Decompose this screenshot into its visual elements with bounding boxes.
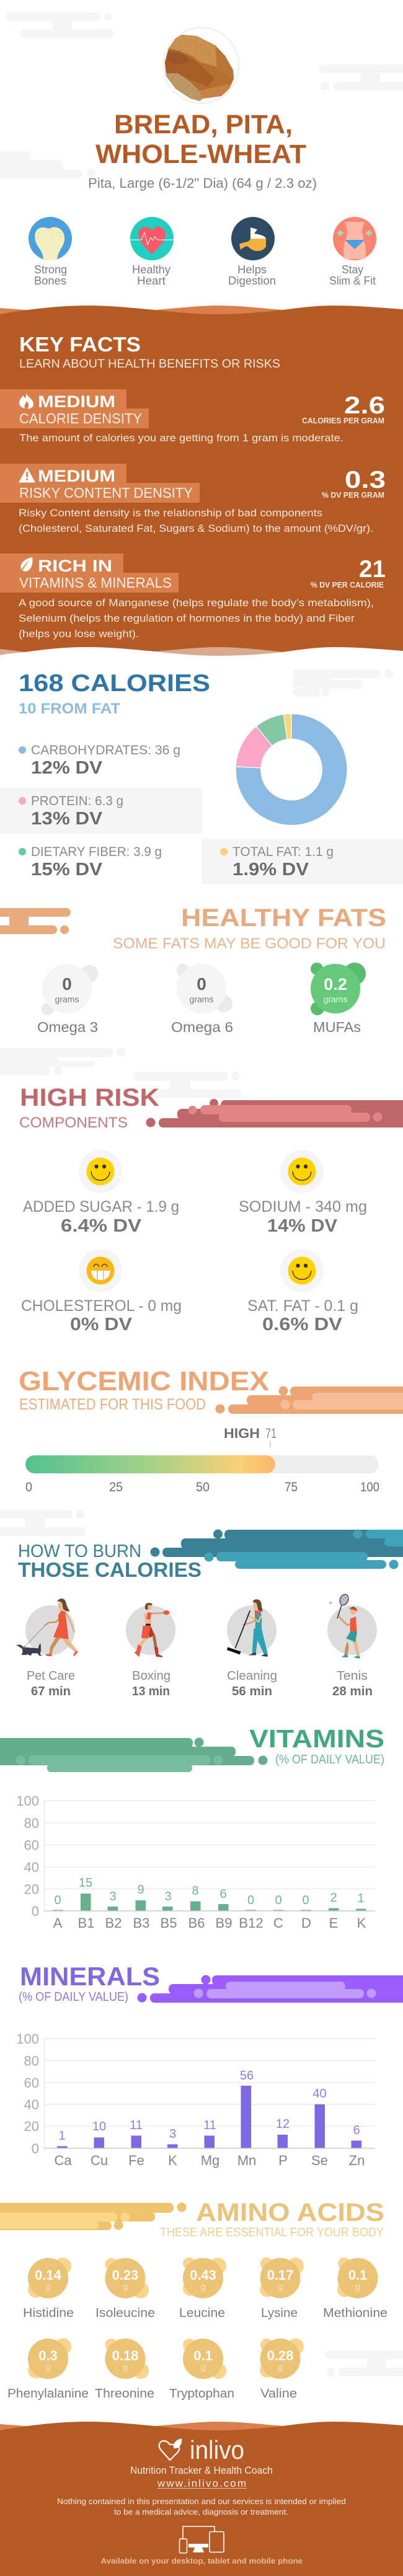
- bar chart: minerals: 6: [353, 2124, 360, 2137]
- macro: carbohydrates: [19, 743, 180, 778]
- macro: total fat: [220, 845, 334, 880]
- macro: dietary fiber: [19, 845, 162, 880]
- amino acid: threonine: g: [123, 2362, 128, 2373]
- activity: tennis: [327, 1593, 377, 1698]
- amino acid: methionine: 0.1: [348, 2267, 367, 2283]
- panel: amino acids: [0, 2198, 388, 2401]
- activity: boxing: 13 min: [132, 1685, 170, 1698]
- macro: protein: PROTEIN: 6.3 g: [31, 794, 123, 808]
- bar chart: vitamins: B5: [161, 1915, 177, 1931]
- disclaimer: to be a medical advice, diagnosis or treatment.: [114, 2507, 288, 2516]
- bar chart: vitamins: B3: [133, 1915, 149, 1931]
- activity: tennis: 28 min: [332, 1685, 373, 1698]
- fact: calorie density: MEDIUM: [38, 392, 115, 411]
- fact: calorie density: 2.6: [344, 392, 385, 419]
- fat: mufas: grams: [324, 994, 347, 1004]
- fat: omega 6: 0: [197, 974, 206, 994]
- benefit: strong bones: [29, 217, 72, 287]
- bar chart: minerals: Fe: [128, 2153, 144, 2168]
- bar chart: minerals: 10: [92, 2120, 106, 2133]
- risk: sodium: [239, 1150, 367, 1236]
- fat: omega 3: [37, 964, 98, 1035]
- panel: healthy fats: [0, 904, 386, 1035]
- website link: www.inlivo.com: [157, 2477, 246, 2489]
- gauge scale: 100: [360, 1480, 379, 1494]
- benefit: healthy heart: Heart: [137, 275, 166, 287]
- fact: calorie density: CALORIES PER GRAM: [302, 416, 384, 425]
- bar chart: minerals: Ca: [54, 2153, 72, 2168]
- fat: mufas: [311, 963, 366, 1035]
- activity: boxing: Boxing: [132, 1669, 170, 1683]
- amino acid: isoleucine: 0.23: [112, 2267, 138, 2283]
- risk: saturated fat: [247, 1249, 358, 1334]
- bar chart: vitamins: 60: [24, 1837, 39, 1853]
- bar chart: vitamins: B12: [239, 1915, 264, 1931]
- amino acid: threonine: [95, 2339, 154, 2401]
- risk: sodium: SODIUM - 340 mg: [239, 1198, 367, 1215]
- bar chart: vitamins: 0: [32, 1903, 39, 1919]
- icon: warning triangle: [19, 467, 35, 482]
- bar chart: minerals: 1: [58, 2129, 66, 2143]
- panel: minerals: [16, 1962, 403, 2168]
- activity: boxing: [126, 1603, 175, 1698]
- heading graphic: [216, 1386, 403, 1414]
- heading: minerals: [19, 1962, 160, 2004]
- bar chart: minerals: 11: [203, 2119, 216, 2132]
- bar chart: minerals: 0: [32, 2141, 39, 2156]
- heading: how to burn: THOSE CALORIES: [18, 1558, 202, 1581]
- icon: leaf: [20, 557, 33, 571]
- amino acid: methionine: Methionine: [323, 2306, 388, 2320]
- bar chart: minerals: 100: [16, 2031, 39, 2047]
- fat: omega 6: grams: [190, 994, 213, 1004]
- heading: high risk: [19, 1084, 159, 1131]
- bar chart: minerals: Se: [311, 2153, 328, 2168]
- bar chart: vitamins: 80: [24, 1815, 39, 1831]
- heading: calories: [19, 670, 210, 717]
- heading: vitamins: [249, 1724, 384, 1767]
- bar chart: vitamins: 9: [137, 1883, 144, 1897]
- food image: bread: [161, 27, 239, 105]
- macro: protein: [19, 794, 123, 829]
- bar chart: minerals: Cu: [91, 2153, 108, 2168]
- amino acid: lysine: g: [278, 2282, 283, 2292]
- panel: calories: [0, 670, 403, 884]
- bar chart: vitamins: 20: [24, 1882, 39, 1897]
- activity: pet care: Pet Care: [27, 1669, 75, 1683]
- bar chart: vitamins: 3: [164, 1890, 172, 1903]
- heading: glycemic index: ESTIMATED FOR THIS FOOD: [19, 1396, 206, 1413]
- bar chart: vitamins: 40: [24, 1859, 39, 1875]
- bar chart: minerals: 40: [24, 2097, 39, 2112]
- availability note: Available on your desktop, tablet and mobile phone: [100, 2556, 303, 2565]
- bar chart: minerals: [16, 2031, 375, 2168]
- fact: rich in vitamins and minerals: % DV PER CALORIE: [311, 580, 384, 589]
- title: [95, 110, 306, 169]
- benefit: helps digestion: Digestion: [228, 275, 276, 287]
- bar chart: minerals: 20: [24, 2119, 39, 2134]
- benefit: stay slim and fit: Stay: [342, 263, 363, 276]
- fact: risky content density: % DV PER GRAM: [322, 490, 384, 500]
- bar chart: vitamins: K: [357, 1915, 366, 1931]
- gauge scale: 75: [285, 1480, 298, 1494]
- amino acid: threonine: Threonine: [95, 2387, 154, 2401]
- bar chart: minerals: Mg: [201, 2153, 219, 2168]
- fact: rich in vitamins and minerals: (helps you lose weight).: [19, 629, 139, 640]
- bar chart: vitamins: 6: [219, 1887, 227, 1901]
- macro: total fat: 1.9% DV: [232, 860, 309, 880]
- amino acid: threonine: 0.18: [112, 2348, 138, 2363]
- disclaimer: Nothing contained in this presentation and our services is intended or implied: [57, 2497, 346, 2506]
- heading: minerals: MINERALS: [20, 1962, 160, 1991]
- heading: calories: 10 FROM FAT: [19, 700, 120, 717]
- amino acid: isoleucine: Isoleucine: [95, 2306, 155, 2320]
- bar chart: vitamins: A: [53, 1915, 63, 1931]
- fat: mufas: MUFAs: [313, 1019, 361, 1035]
- heading: glycemic index: [19, 1366, 269, 1413]
- bar chart: vitamins: 0: [302, 1894, 309, 1907]
- amino acid: tryptophan: g: [200, 2362, 206, 2373]
- amino acid: tryptophan: Tryptophan: [169, 2387, 234, 2401]
- bar chart: minerals: 56: [240, 2069, 254, 2083]
- benefit: helps digestion: Helps: [237, 263, 267, 276]
- benefit: healthy heart: [130, 217, 174, 287]
- illustration: boxer: [135, 1603, 169, 1657]
- heading graphic: [0, 2203, 186, 2230]
- heading: high risk: HIGH RISK: [20, 1084, 159, 1111]
- amino acid: methionine: g: [355, 2282, 360, 2292]
- amino acid: phenylalanine: Phenylalanine: [7, 2387, 89, 2401]
- activity: cleaning: [227, 1599, 277, 1698]
- heading: amino acids: AMINO ACIDS: [196, 2198, 384, 2226]
- heading: healthy fats: [113, 904, 386, 952]
- bar chart: vitamins: D: [301, 1915, 311, 1931]
- risk: cholesterol: 0% DV: [70, 1315, 133, 1334]
- amino acid: phenylalanine: g: [45, 2362, 51, 2373]
- fact: risky content density: 0.3: [345, 467, 386, 493]
- bar chart: vitamins: 8: [192, 1884, 199, 1898]
- fact: rich in vitamins and minerals: A good source of Manganese (helps regulate the body’s metabolism),: [19, 598, 374, 609]
- benefit: strong bones: Bones: [34, 275, 66, 287]
- macro: total fat: TOTAL FAT: 1.1 g: [232, 845, 334, 859]
- bar chart: vitamins: E: [329, 1915, 338, 1931]
- fat: omega 6: [171, 964, 233, 1035]
- fact: risky content density: Risky Content density is the relationship of bad components: [19, 508, 322, 519]
- illustration: woman sweeping: [227, 1599, 268, 1657]
- macro: protein: 13% DV: [31, 809, 103, 829]
- donut chart: [236, 714, 347, 826]
- bar chart: vitamins: 2: [330, 1891, 337, 1905]
- icon: flame: [19, 392, 33, 408]
- bar chart: vitamins: B9: [216, 1915, 232, 1931]
- macro: dietary fiber: DIETARY FIBER: 3.9 g: [31, 845, 162, 859]
- activity: cleaning: 56 min: [232, 1685, 272, 1698]
- icon: devices: [180, 2526, 224, 2553]
- heading: high risk: COMPONENTS: [19, 1114, 128, 1131]
- heading: amino acids: THESE ARE ESSENTIAL FOR YOUR BODY: [160, 2226, 384, 2239]
- bar chart: vitamins: B6: [188, 1915, 205, 1931]
- risk: saturated fat: SAT. FAT - 0.1 g: [247, 1297, 358, 1315]
- heading: amino acids: [160, 2198, 384, 2239]
- fat: omega 3: grams: [55, 994, 79, 1004]
- amino acid: phenylalanine: [7, 2338, 89, 2401]
- risk: cholesterol: [21, 1249, 182, 1334]
- panel: key facts: [0, 306, 403, 656]
- bar chart: minerals: 80: [24, 2053, 39, 2069]
- bar chart: minerals: 60: [24, 2075, 39, 2091]
- fact: rich in vitamins and minerals: Selenium (helps the regulation of hormones in the body) and Fiber: [19, 613, 355, 624]
- glycemic gauge bar: [25, 1455, 379, 1473]
- fact: rich in vitamins and minerals: RICH IN: [38, 557, 112, 575]
- title: BREAD, PITA,: [114, 110, 293, 139]
- amino acid: lysine: 0.17: [267, 2267, 293, 2283]
- macro: carbohydrates: CARBOHYDRATES: 36 g: [31, 743, 180, 757]
- fact: risky content density: (Cholesterol, Saturated Fat, Sugars & Sodium) to the amount (%DV/gr).: [19, 523, 373, 534]
- gauge scale: [25, 1480, 379, 1494]
- heading: glycemic index: GLYCEMIC INDEX: [19, 1366, 269, 1396]
- amino acid: valine: 0.28: [267, 2348, 293, 2363]
- amino acid: phenylalanine: 0.3: [38, 2348, 58, 2363]
- fact: risky content density: MEDIUM: [38, 467, 115, 485]
- fact: rich in vitamins and minerals: VITAMINS & MINERALS: [19, 575, 172, 591]
- fat: omega 3: 0: [62, 974, 72, 994]
- amino acid: isoleucine: g: [123, 2282, 128, 2292]
- benefit: helps digestion: [228, 217, 276, 287]
- fact: rich in vitamins and minerals: [0, 554, 386, 640]
- amino acid: lysine: [260, 2257, 304, 2320]
- fat: omega 3: Omega 3: [37, 1019, 98, 1035]
- bar chart: minerals: Zn: [349, 2153, 365, 2168]
- fact: calorie density: CALORIE DENSITY: [19, 410, 142, 426]
- panel: vitamins: [0, 1724, 384, 1931]
- legend row backgrounds: [0, 788, 403, 884]
- heading: healthy fats: SOME FATS MAY BE GOOD FOR YOU: [113, 935, 386, 952]
- serving size subtitle: Pita, Large (6-1/2" Dia) (64 g / 2.3 oz): [88, 175, 317, 191]
- gauge scale: 0: [25, 1480, 32, 1494]
- bar chart: vitamins: 0: [275, 1894, 282, 1907]
- benefit: healthy heart: Healthy: [132, 263, 170, 276]
- bar chart: minerals: Mn: [237, 2153, 256, 2168]
- bar chart: vitamins: 100: [16, 1793, 39, 1809]
- heading graphic: [0, 908, 71, 934]
- heading: key facts: KEY FACTS: [19, 333, 141, 356]
- heading graphic: [150, 1530, 403, 1569]
- amino acid: methionine: [323, 2257, 388, 2320]
- heading: vitamins: (% OF DAILY VALUE): [275, 1753, 384, 1767]
- heading: how to burn: HOW TO BURN: [18, 1542, 141, 1561]
- amino acid: leucine: Leucine: [179, 2306, 225, 2320]
- amino acid: leucine: 0.43: [190, 2267, 216, 2283]
- activity: tennis: Tenis: [337, 1669, 368, 1683]
- amino acid: histidine: Histidine: [23, 2306, 74, 2320]
- panel: how to burn those calories: [16, 1530, 403, 1698]
- activity: cleaning: Cleaning: [227, 1669, 277, 1683]
- heading graphic: [138, 1975, 403, 2003]
- heading: healthy fats: HEALTHY FATS: [181, 904, 386, 932]
- panel: glycemic index: [19, 1366, 403, 1494]
- risk: cholesterol: CHOLESTEROL - 0 mg: [21, 1297, 182, 1315]
- bar chart: minerals: 12: [276, 2117, 290, 2131]
- fact: calorie density: The amount of calories you are getting from 1 gram is moderate.: [19, 433, 343, 444]
- title: WHOLE-WHEAT: [95, 139, 306, 169]
- gauge scale: 50: [196, 1480, 210, 1494]
- amino acid: valine: Valine: [260, 2387, 297, 2401]
- activity: pet care: 67 min: [31, 1685, 71, 1698]
- amino acid: valine: [260, 2338, 304, 2401]
- macro: carbohydrates: 12% DV: [31, 758, 103, 778]
- illustration: tennis player: [329, 1593, 360, 1659]
- fat: mufas: 0.2: [324, 975, 347, 994]
- bar chart: vitamins: 0: [54, 1894, 61, 1907]
- disclaimer: [57, 2497, 346, 2516]
- panel: footer: [0, 2422, 403, 2576]
- fact: calorie density: [0, 389, 385, 444]
- amino acid: leucine: g: [200, 2282, 206, 2292]
- risk: saturated fat: 0.6% DV: [262, 1315, 343, 1334]
- risk: sodium: 14% DV: [267, 1216, 338, 1236]
- risk: added sugar: ADDED SUGAR - 1.9 g: [23, 1198, 179, 1215]
- amino acid: tryptophan: 0.1: [193, 2348, 213, 2363]
- bar chart: vitamins: C: [273, 1915, 283, 1931]
- fact: rich in vitamins and minerals: 21: [359, 556, 386, 583]
- bar chart: minerals: P: [278, 2153, 288, 2168]
- bar chart: vitamins: 1: [357, 1892, 365, 1905]
- illustration: woman walking dog: [16, 1599, 78, 1656]
- amino acid: histidine: 0.14: [35, 2267, 62, 2283]
- macro: dietary fiber: 15% DV: [31, 860, 103, 880]
- logo: inlivo: [159, 2435, 244, 2464]
- heading: minerals: (% OF DAILY VALUE): [19, 1990, 128, 2004]
- gauge scale: 25: [109, 1480, 123, 1494]
- bar chart: vitamins: B2: [105, 1915, 122, 1931]
- bar chart: vitamins: [16, 1793, 375, 1931]
- benefit: stay slim and fit: Slim & Fit: [329, 275, 376, 287]
- bar chart: minerals: 3: [169, 2127, 176, 2141]
- heading: key facts: [19, 333, 280, 371]
- heading: how to burn: [18, 1542, 202, 1581]
- amino acid: tryptophan: [169, 2339, 234, 2401]
- heading: vitamins: VITAMINS: [249, 1724, 384, 1753]
- fat: omega 6: Omega 6: [171, 1019, 233, 1035]
- gauge value label: 71: [265, 1426, 277, 1441]
- amino acid: isoleucine: [95, 2258, 155, 2320]
- gauge value label: [224, 1426, 277, 1448]
- bar chart: minerals: K: [168, 2153, 177, 2168]
- bar chart: minerals: 11: [130, 2119, 143, 2132]
- benefit: strong bones: Strong: [34, 263, 67, 276]
- logo: inlivo: inlivo: [190, 2435, 244, 2464]
- risk: added sugar: [23, 1150, 179, 1236]
- amino acid: histidine: g: [45, 2282, 51, 2292]
- fact: risky content density: [0, 464, 386, 534]
- bar chart: vitamins: B1: [78, 1915, 94, 1931]
- gauge value label: HIGH: [224, 1426, 260, 1441]
- amino acid: lysine: Lysine: [261, 2306, 298, 2320]
- bar chart: vitamins: 0: [247, 1894, 254, 1907]
- heading graphic: [146, 1099, 403, 1127]
- heading: key facts: LEARN ABOUT HEALTH BENEFITS OR RISKS: [19, 358, 280, 371]
- amino acid: valine: g: [278, 2362, 283, 2373]
- benefit: stay slim and fit: [329, 217, 376, 287]
- amino acid: leucine: [179, 2257, 226, 2320]
- bar chart: vitamins: 15: [79, 1876, 92, 1890]
- amino acid: histidine: [23, 2257, 74, 2320]
- fact: risky content density: RISKY CONTENT DENSITY: [19, 485, 193, 501]
- bar chart: vitamins: 3: [109, 1890, 117, 1903]
- activity: pet care: [16, 1599, 78, 1698]
- bar chart: minerals: 40: [312, 2087, 327, 2101]
- heading: calories: 168 CALORIES: [19, 670, 210, 697]
- risk: added sugar: 6.4% DV: [61, 1216, 142, 1236]
- tagline: Nutrition Tracker & Health Coach: [130, 2465, 273, 2476]
- heading graphic: [0, 1738, 268, 1772]
- panel: high risk components: [19, 1084, 403, 1334]
